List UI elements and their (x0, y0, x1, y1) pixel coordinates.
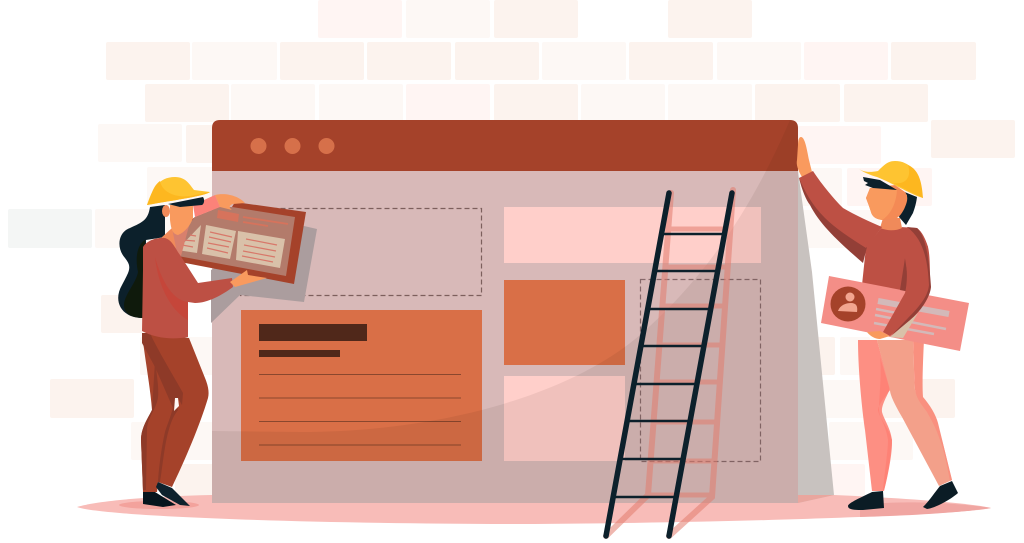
card text lines (874, 301, 949, 334)
avatar head (846, 292, 854, 302)
shoes (848, 481, 958, 510)
orange image panel (504, 280, 625, 365)
knee gap (174, 398, 179, 411)
raised hand (215, 194, 245, 210)
hair back (897, 189, 917, 225)
inner arm shade (900, 258, 910, 292)
browser body (212, 171, 798, 503)
hard hat (859, 161, 923, 198)
lower hand (230, 270, 267, 287)
trousers (141, 333, 209, 492)
right foot shadow (860, 502, 991, 517)
hard hat shade (147, 181, 210, 205)
card heading bars (217, 210, 239, 222)
neck (880, 218, 902, 230)
browser diagonal shade (212, 120, 798, 503)
card frame (171, 202, 306, 284)
hair inner shade (124, 240, 145, 318)
thigh shade (142, 333, 183, 408)
second calf shade (158, 398, 178, 482)
back leg shade (878, 357, 892, 490)
face (170, 205, 193, 235)
upper sleeve see-through (171, 222, 190, 256)
card text lines (182, 232, 277, 262)
raised arm shade (799, 178, 867, 263)
browser side shadow on floor (798, 495, 834, 503)
visor hair (168, 197, 204, 207)
wireframe card held up (171, 202, 306, 284)
sweater shade (155, 257, 188, 320)
floor shadow (77, 495, 991, 524)
title bar dots (250, 138, 334, 154)
fringe (863, 177, 897, 190)
browser side shadow (798, 171, 834, 503)
man worker (797, 137, 969, 510)
browser window (212, 120, 798, 503)
hard hat shade (893, 165, 923, 198)
legs (141, 333, 209, 492)
woman worker (118, 177, 317, 507)
hard hat (147, 177, 210, 205)
browser title bar (212, 120, 798, 171)
head (866, 185, 907, 220)
profile card (821, 276, 969, 351)
hand under card (867, 331, 890, 339)
pink lower panel (504, 376, 625, 461)
orange text panel (241, 310, 482, 461)
sweater (142, 238, 233, 338)
card columns (177, 225, 285, 268)
card background (821, 276, 969, 351)
card cuff (890, 313, 918, 338)
forearm (883, 228, 930, 336)
avatar circle (830, 286, 866, 322)
ladder shadow (606, 190, 733, 536)
sweater torso (862, 227, 928, 300)
card inner (175, 207, 295, 276)
shoes (143, 482, 190, 507)
avatar body (838, 303, 857, 312)
back leg (858, 340, 892, 491)
front leg stripe (913, 340, 952, 481)
left foot shadow (119, 501, 199, 509)
raised sleeve (193, 195, 220, 217)
front leg (877, 340, 952, 486)
ear (162, 205, 170, 217)
shoulder edge shade (891, 227, 931, 336)
ladder (606, 193, 732, 536)
dashed placeholder: right (640, 280, 760, 462)
calf shade (141, 361, 158, 490)
legs (858, 340, 952, 491)
raised arm (799, 171, 882, 248)
neck (161, 228, 176, 248)
card shadow on browser (211, 226, 317, 323)
pink banner panel (504, 207, 761, 263)
dashed placeholder: top left (240, 208, 482, 296)
raised hand (797, 137, 812, 177)
face highlight (866, 188, 897, 220)
hair (118, 205, 165, 318)
